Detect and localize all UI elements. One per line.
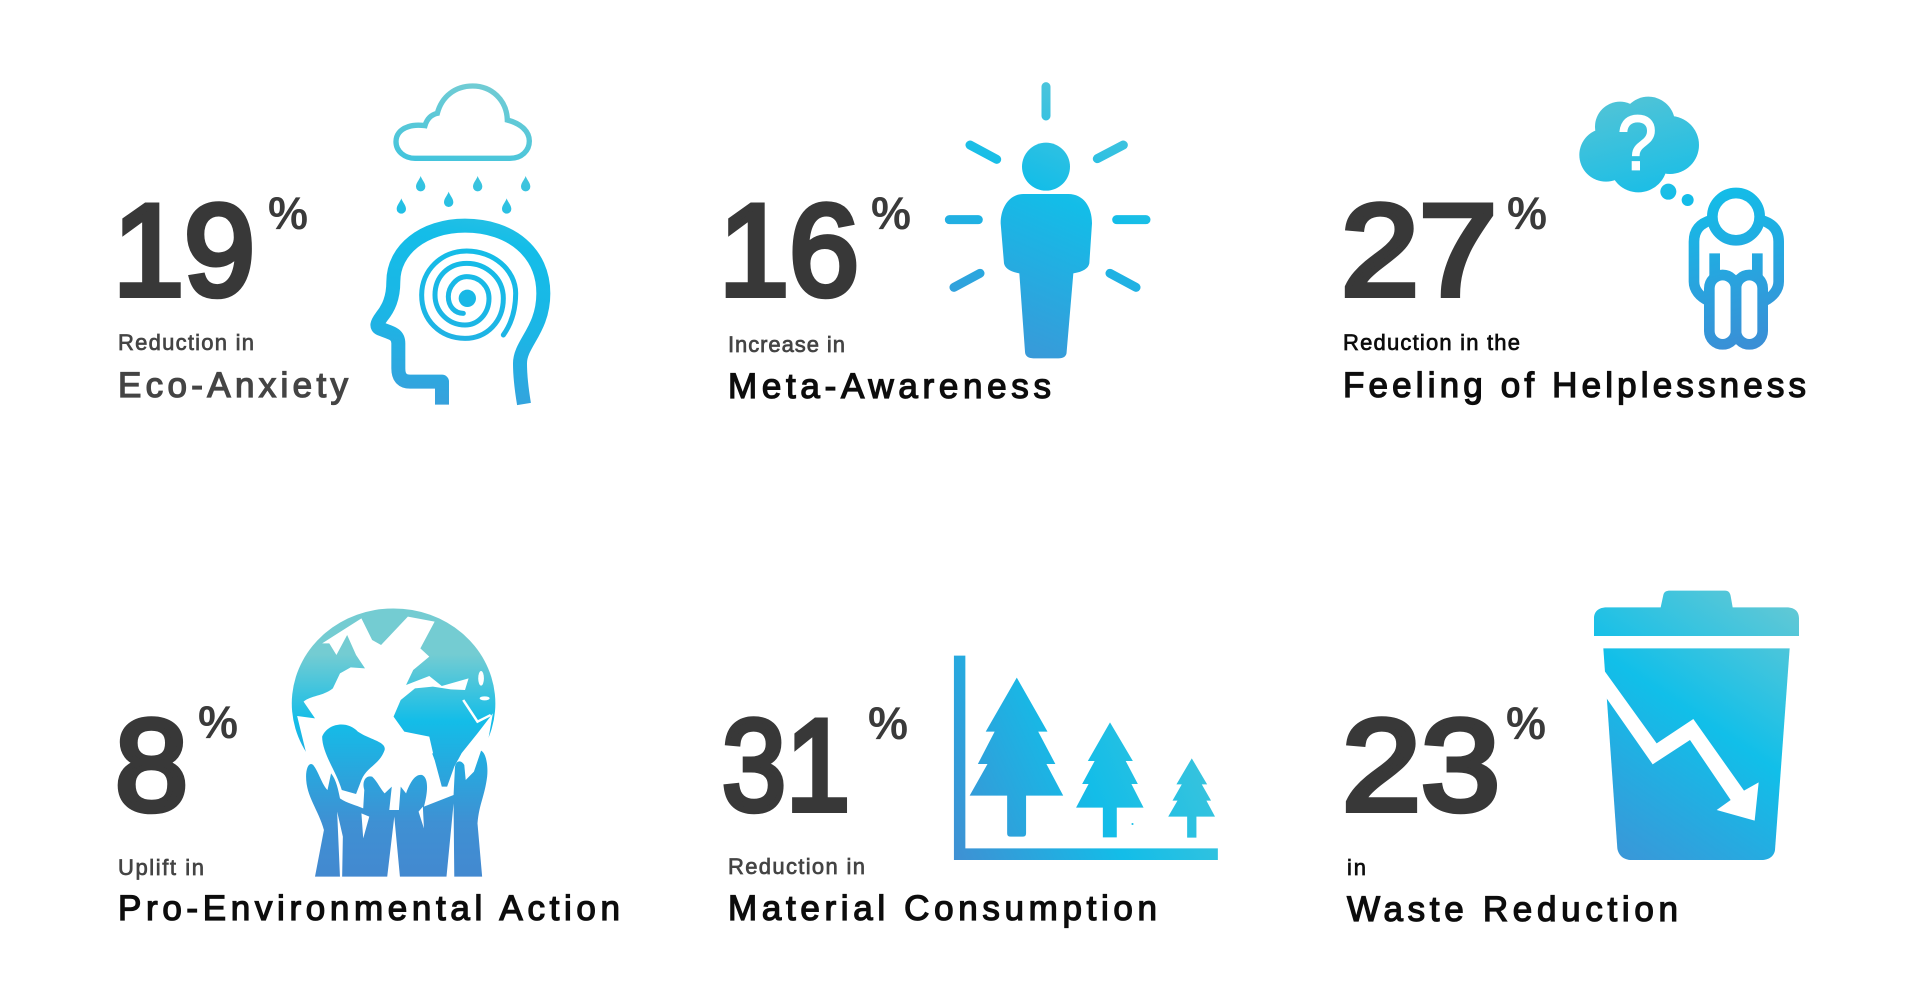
percent sign: % — [198, 696, 238, 748]
label: in: in — [1347, 855, 1366, 880]
percent sign: % — [268, 187, 308, 239]
panel: waste reduction — [1342, 591, 1799, 929]
panel: meta-awareness — [719, 87, 1146, 406]
icon: shrinking trees chart — [954, 656, 1218, 860]
stat: 19 percent: 19 — [113, 177, 255, 323]
heading: eco-anxiety: Eco-Anxiety — [118, 366, 348, 405]
panel: material consumption — [722, 656, 1218, 928]
percent sign: % — [1506, 697, 1546, 749]
percent sign: % — [868, 697, 908, 749]
label: increase in: Increase in — [728, 332, 845, 357]
panel: eco-anxiety — [113, 86, 543, 405]
icon: trash bin with falling arrow — [1594, 591, 1799, 860]
heading: meta-awareness: Meta-Awareness — [728, 367, 1051, 406]
stat: 8 percent: 8 — [115, 692, 188, 838]
icon: person with thought cloud — [1579, 97, 1779, 344]
heading: feeling of helplessness: Feeling of Helplessness — [1343, 366, 1806, 405]
heading: pro-environmental action: Pro-Environmental Action — [118, 889, 620, 928]
icon: head under rain cloud — [377, 86, 543, 405]
heading: material consumption: Material Consumption — [728, 889, 1157, 928]
label: uplift in: Uplift in — [118, 855, 204, 880]
icon: person with thought cloud: ? — [1617, 101, 1657, 186]
stat: 16 percent: 16 — [719, 177, 859, 323]
label: reduction in: Reduction in — [118, 330, 254, 355]
label: reduction in: Reduction in — [728, 854, 865, 879]
label: reduction in the: Reduction in the — [1343, 330, 1520, 355]
stat: 23 percent: 23 — [1342, 692, 1500, 838]
panel: feeling of helplessness — [1341, 97, 1806, 405]
stat: 31 percent: 31 — [722, 692, 850, 838]
panel: pro-environmental action — [115, 608, 620, 928]
percent sign: % — [1507, 187, 1547, 239]
heading: waste reduction: Waste Reduction — [1347, 890, 1678, 929]
percent sign: % — [871, 187, 911, 239]
stat: 27 percent: 27 — [1341, 177, 1497, 323]
icon: hands holding globe — [292, 608, 495, 877]
icon: person with radiating lines — [949, 87, 1146, 358]
